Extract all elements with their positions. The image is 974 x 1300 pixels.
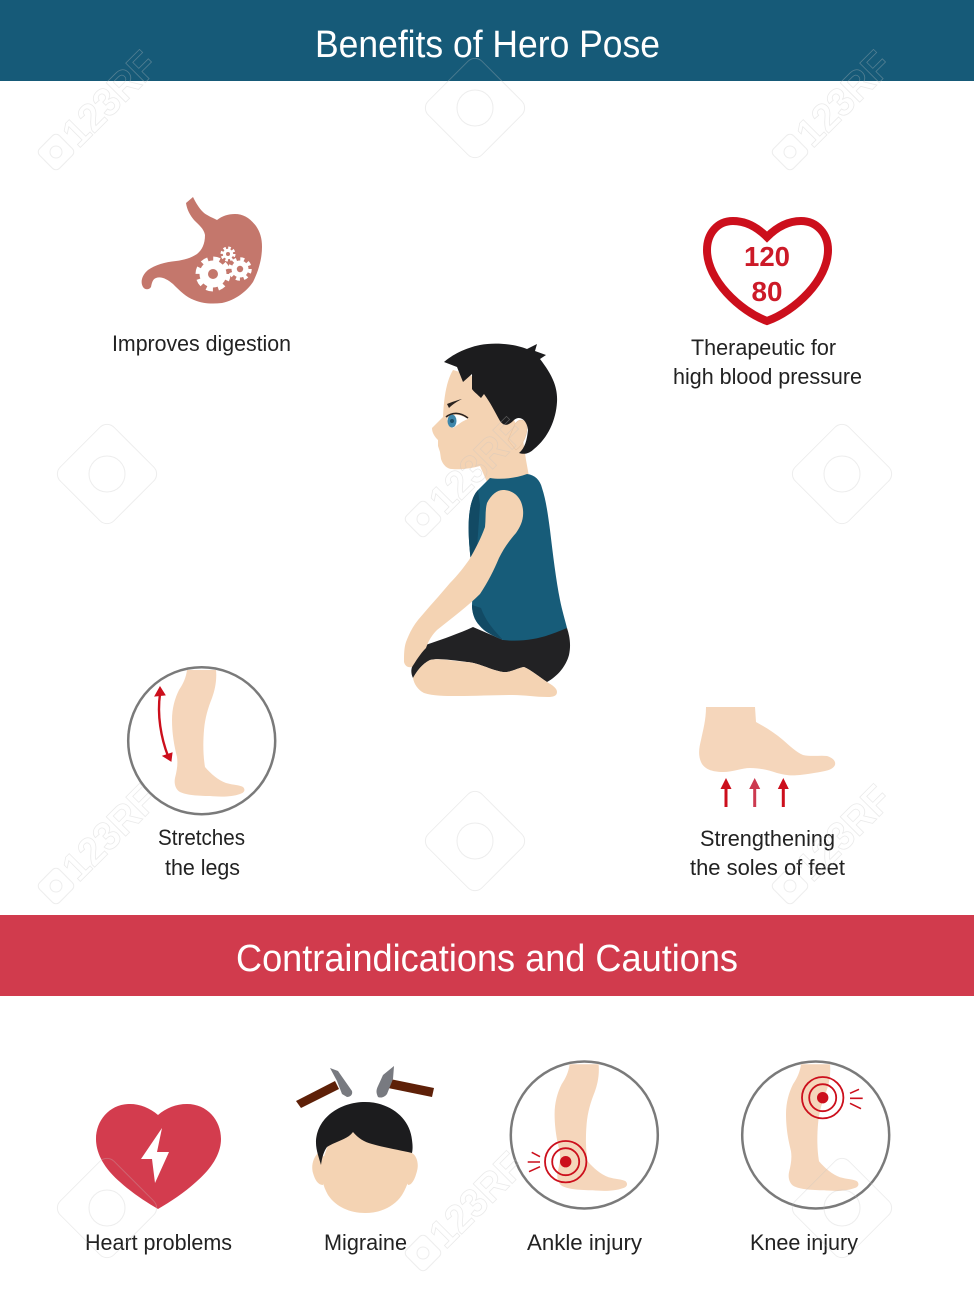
icon: leg stretch circle: [128, 667, 275, 814]
shirt shadow: [469, 490, 503, 640]
label: therapeutic for high blood pressure: Therapeutic for: [691, 335, 836, 360]
header bar: contraindications: [0, 915, 974, 996]
label: strengthening the soles of feet: [690, 826, 845, 880]
ears: [312, 1153, 418, 1185]
pain marker: [528, 1141, 586, 1182]
icon: knee injury circle: [742, 1062, 889, 1208]
header bar: benefits: [0, 0, 974, 81]
icon: foot with arrows: [699, 707, 835, 807]
label: stretches the legs: Stretches: [158, 825, 245, 850]
label: strengthening the soles of feet: the soles of feet: [690, 855, 845, 880]
gear: small: [222, 248, 234, 260]
hammer left: [296, 1068, 352, 1108]
face: [321, 1125, 412, 1213]
icon: blood pressure heart: 120: [744, 241, 790, 272]
watermark stamps: 123RF: [54, 777, 166, 890]
icon: stomach with gears: [142, 197, 262, 304]
watermark stamps: 123RF: [421, 1144, 533, 1257]
gear: medium: [230, 259, 250, 279]
shorts: [411, 627, 570, 682]
label: knee injury: Knee injury: [750, 1230, 858, 1255]
arm: [404, 490, 523, 667]
title: benefits: Benefits of Hero Pose: [315, 24, 660, 66]
arrow 2: [749, 778, 760, 807]
hair: [444, 344, 557, 454]
icon: ankle injury circle: [511, 1062, 658, 1208]
leg: [786, 1064, 858, 1191]
icon: heart problems: [96, 1104, 221, 1209]
shirt: [469, 474, 567, 641]
pain marker: [802, 1077, 863, 1118]
watermark stamps: 123RF: [788, 43, 900, 156]
ear: [508, 420, 527, 450]
arrow: stretch: [155, 687, 172, 761]
leg: [555, 1064, 627, 1191]
label: strengthening the soles of feet: Strengthening: [700, 826, 835, 851]
eye: [446, 399, 468, 428]
arrow 3: [778, 778, 789, 807]
label: heart problems: Heart problems: [85, 1230, 232, 1255]
gear: large: [198, 259, 228, 289]
title: contraindications: Contraindications and Cautions: [236, 938, 738, 980]
arrow 1: [720, 778, 732, 807]
leg: [172, 670, 244, 797]
label: improves digestion: Improves digestion: [112, 331, 291, 356]
label: stretches the legs: the legs: [165, 855, 240, 880]
hair: [316, 1102, 413, 1165]
label: therapeutic for high blood pressure: [673, 335, 862, 389]
neck and face: [432, 370, 530, 482]
icon: migraine head with hammers: [296, 1066, 434, 1213]
watermark stamps: 123RF: [54, 43, 166, 156]
label: ankle injury: Ankle injury: [527, 1230, 642, 1255]
label: stretches the legs: [158, 825, 245, 880]
icon: blood pressure heart: 80: [752, 276, 782, 307]
leg and foot: [413, 659, 557, 697]
label: therapeutic for high blood pressure: high blood pressure: [673, 364, 862, 389]
watermark stamps: 123RF: [421, 410, 533, 523]
hammer right: [376, 1066, 434, 1098]
icon: blood pressure heart: [707, 221, 828, 321]
label: migraine: Migraine: [324, 1230, 407, 1255]
figure: boy in hero pose: [404, 344, 570, 697]
lightning bolt: [141, 1128, 169, 1183]
watermark stamps: 123RF: [788, 777, 900, 890]
